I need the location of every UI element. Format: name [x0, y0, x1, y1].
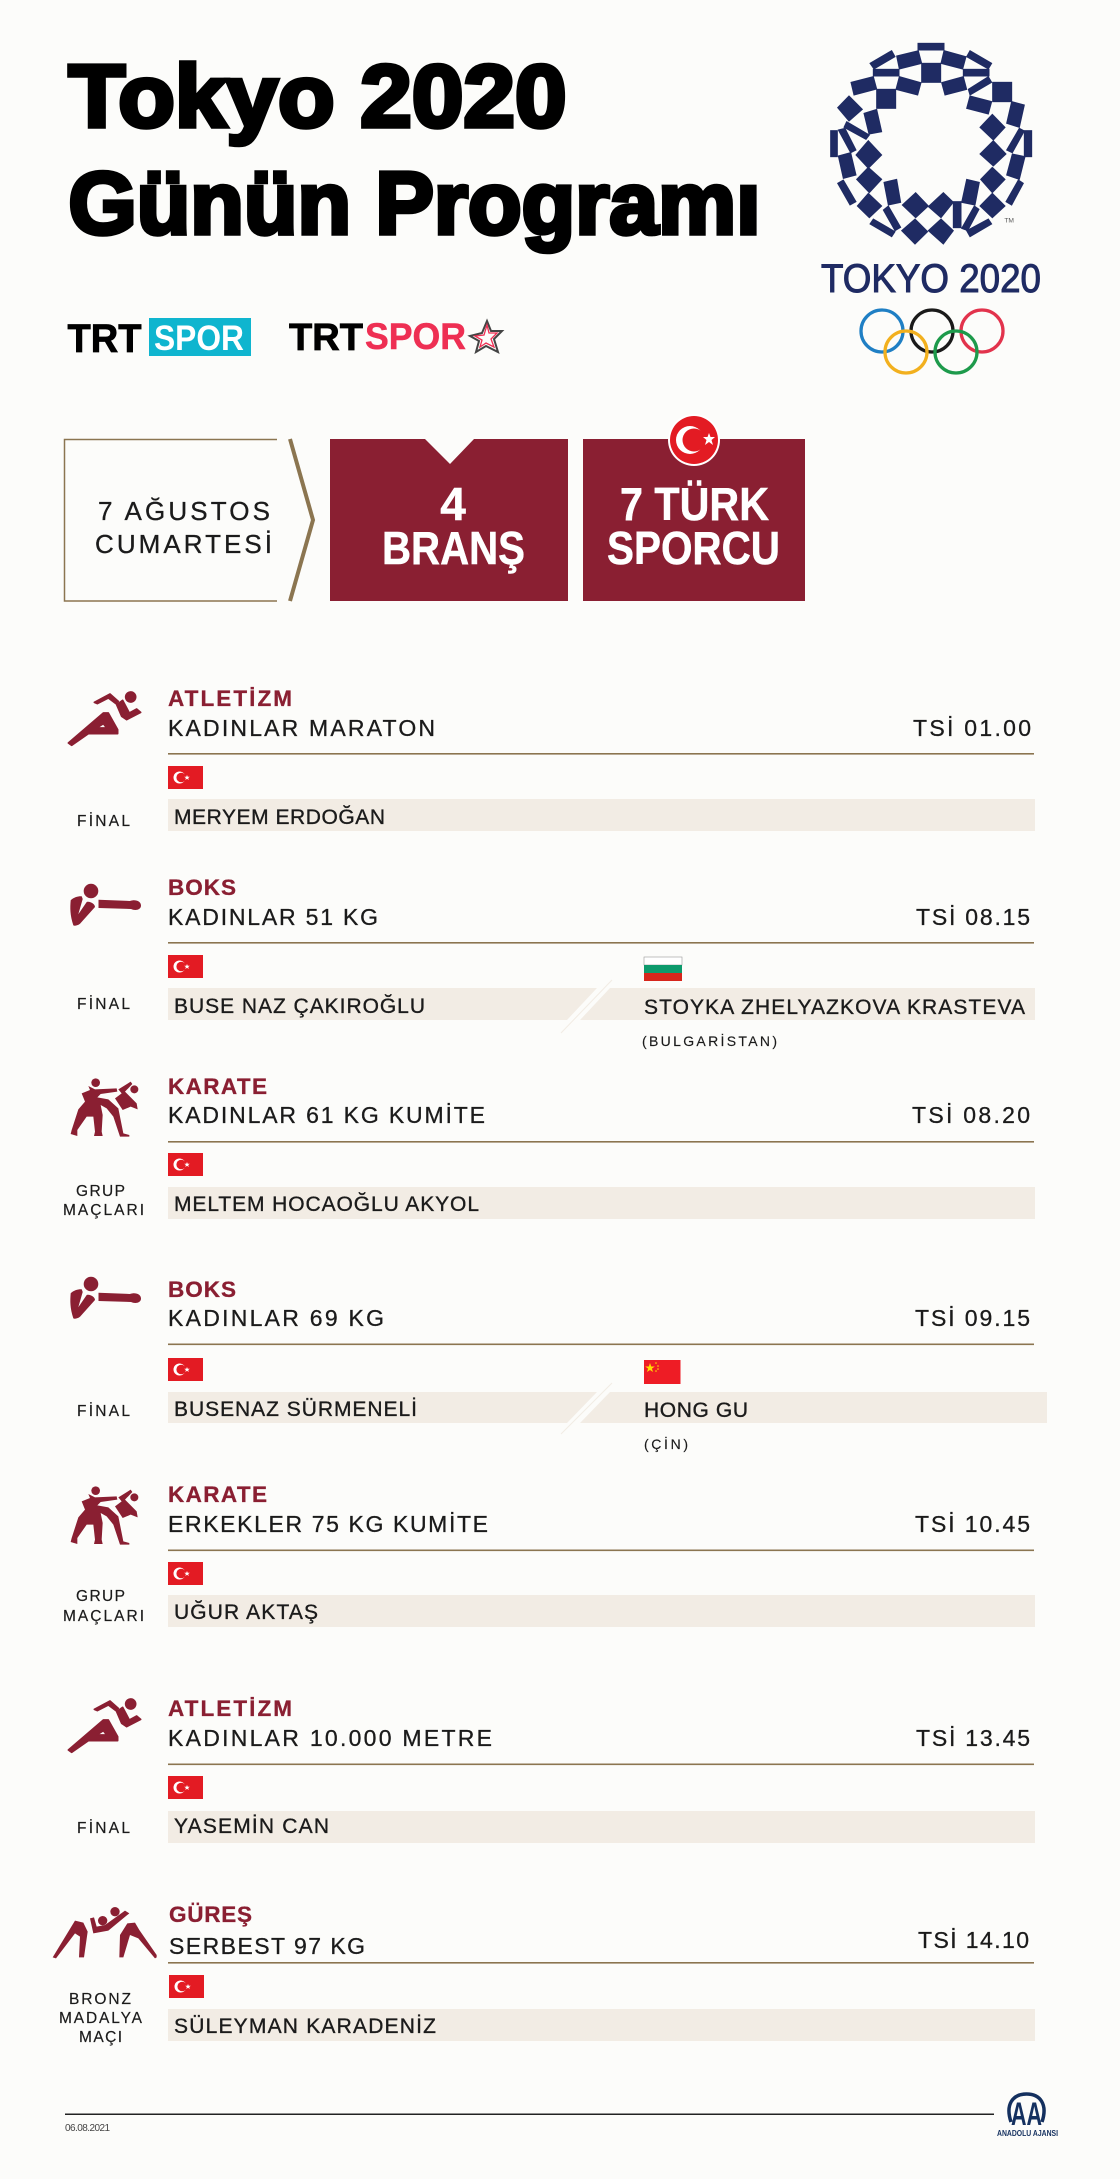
stat: 4 branş: 4: [440, 478, 466, 530]
emblem wordmark: TOKYO 2020: [821, 257, 1041, 301]
row: atletizm maraton: ATLETİZM: [168, 686, 292, 711]
row: karate erkekler 75 kg: MAÇLARI: [63, 1608, 144, 1625]
row: karate kadınlar 61 kg: MELTEM HOCAOĞLU AKYOL: [174, 1193, 479, 1216]
icon: runner: [68, 1699, 141, 1752]
emblem: Tokyo 2020 chequered ring: TM: [1004, 218, 1014, 225]
date stamp: 06.08.2021: [65, 2123, 110, 2134]
row: boks 51 kg: BUSE NAZ ÇAKIROĞLU: [174, 995, 425, 1018]
row: boks 51 kg: [70, 875, 1035, 1049]
row: karate erkekler 75 kg: ERKEKLER 75 KG KUMİTE: [168, 1511, 488, 1537]
row: boks 69 kg: KADINLAR 69 KG: [168, 1305, 384, 1331]
title: Tokyo 2020: [68, 46, 566, 146]
emblem: Tokyo 2020 chequered ring: [831, 43, 1032, 244]
icon: boxer: [70, 884, 141, 926]
icon: runner: [68, 692, 141, 745]
row: boks 51 kg: FİNAL: [77, 995, 130, 1013]
flag: China: [644, 1360, 680, 1384]
row: karate erkekler 75 kg: GRUP: [76, 1588, 125, 1605]
row: atletizm maraton: MERYEM ERDOĞAN: [174, 806, 385, 829]
row: boks 69 kg: [70, 1277, 1047, 1452]
row: karate kadınlar 61 kg: TSİ 08.20: [912, 1102, 1030, 1128]
row: karate erkekler 75 kg: TSİ 10.45: [915, 1511, 1030, 1537]
row: boks 69 kg: (ÇİN): [644, 1435, 688, 1452]
logo: TRT Spor: TRT: [68, 317, 142, 361]
row: güreş serbest 97 kg: SERBEST 97 KG: [169, 1933, 365, 1959]
row: atletizm maraton: FİNAL: [77, 812, 130, 830]
icon: wrestlers: [53, 1907, 157, 1958]
row: atletizm 10.000 metre: FİNAL: [77, 1819, 130, 1837]
row: atletizm maraton: TSİ 01.00: [913, 715, 1031, 741]
row: boks 69 kg: HONG GU: [644, 1399, 748, 1422]
logo: Anadolu Ajansı: AA: [1011, 2096, 1042, 2132]
row: güreş serbest 97 kg: [53, 1902, 1035, 2046]
row: güreş serbest 97 kg: BRONZ: [69, 1991, 131, 2008]
icon: karate: [71, 1486, 138, 1545]
date box: CUMARTESİ: [95, 529, 272, 559]
logo: TRT Spor Yıldız: [289, 316, 502, 359]
row: atletizm maraton: KADINLAR MARATON: [168, 715, 435, 741]
row: boks 51 kg: BOKS: [168, 875, 236, 900]
row: karate erkekler 75 kg: UĞUR AKTAŞ: [174, 1601, 318, 1624]
logo: TRT Spor Yıldız: TRT: [289, 317, 363, 359]
stat: 7 Türk sporcu: SPORCU: [607, 522, 780, 574]
title: [68, 46, 760, 252]
date box: [64, 439, 313, 601]
row: güreş serbest 97 kg: SÜLEYMAN KARADENİZ: [174, 2015, 436, 2038]
row: boks 69 kg: BUSENAZ SÜRMENELİ: [174, 1398, 417, 1421]
row: atletizm 10.000 metre: ATLETİZM: [168, 1696, 292, 1721]
row: güreş serbest 97 kg: MAÇI: [79, 2029, 122, 2046]
stat: 7 Türk sporcu: 7 TÜRK: [620, 478, 769, 530]
row: karate erkekler 75 kg: KARATE: [168, 1482, 267, 1507]
row: atletizm 10.000 metre: TSİ 13.45: [916, 1725, 1030, 1751]
footer rule: [65, 2114, 994, 2115]
logo: Anadolu Ajansı: [997, 2094, 1058, 2138]
row: karate erkekler 75 kg: [63, 1482, 1035, 1627]
row: atletizm 10.000 metre: YASEMİN CAN: [174, 1815, 329, 1838]
row: boks 69 kg: BOKS: [168, 1277, 236, 1302]
icon: boxer: [70, 1277, 141, 1319]
row: boks 51 kg: (BULGARİSTAN): [642, 1032, 777, 1049]
row: boks 69 kg: FİNAL: [77, 1402, 130, 1420]
row: atletizm 10.000 metre: KADINLAR 10.000 METRE: [168, 1725, 492, 1751]
stat: 4 branş: BRANŞ: [382, 522, 525, 574]
olympic rings: [861, 310, 1003, 373]
row: karate kadınlar 61 kg: KADINLAR 61 KG KUMİTE: [168, 1102, 485, 1128]
row: karate kadınlar 61 kg: MAÇLARI: [63, 1202, 144, 1219]
date box: 7 AĞUSTOS: [98, 496, 270, 526]
logo: TRT Spor Yıldız: SPOR: [365, 316, 466, 357]
row: boks 69 kg: TSİ 09.15: [915, 1305, 1030, 1331]
logo: TRT Spor: SPOR: [154, 319, 244, 358]
logo: Anadolu Ajansı: ANADOLU AJANSI: [997, 2128, 1058, 2138]
row: güreş serbest 97 kg: GÜREŞ: [169, 1902, 252, 1927]
icon: karate: [71, 1078, 138, 1137]
row: güreş serbest 97 kg: TSİ 14.10: [918, 1927, 1029, 1953]
title: Günün Programı: [68, 154, 760, 252]
logo: TRT Spor: [68, 317, 251, 361]
row: karate kadınlar 61 kg: [63, 1074, 1035, 1219]
row: boks 51 kg: TSİ 08.15: [916, 904, 1030, 930]
row: karate kadınlar 61 kg: KARATE: [168, 1074, 267, 1099]
row: boks 51 kg: KADINLAR 51 KG: [168, 904, 378, 930]
row: karate kadınlar 61 kg: GRUP: [76, 1183, 125, 1200]
row: boks 51 kg: STOYKA ZHELYAZKOVA KRASTEVA: [644, 996, 1025, 1019]
row: güreş serbest 97 kg: MADALYA: [59, 2010, 143, 2027]
stat: 4 branş: [330, 439, 568, 601]
flag: Bulgaria: [644, 957, 682, 981]
stat: 7 Türk sporcu: [583, 414, 805, 601]
row: atletizm maraton: [68, 686, 1035, 831]
row: atletizm 10.000 metre: [68, 1696, 1035, 1843]
